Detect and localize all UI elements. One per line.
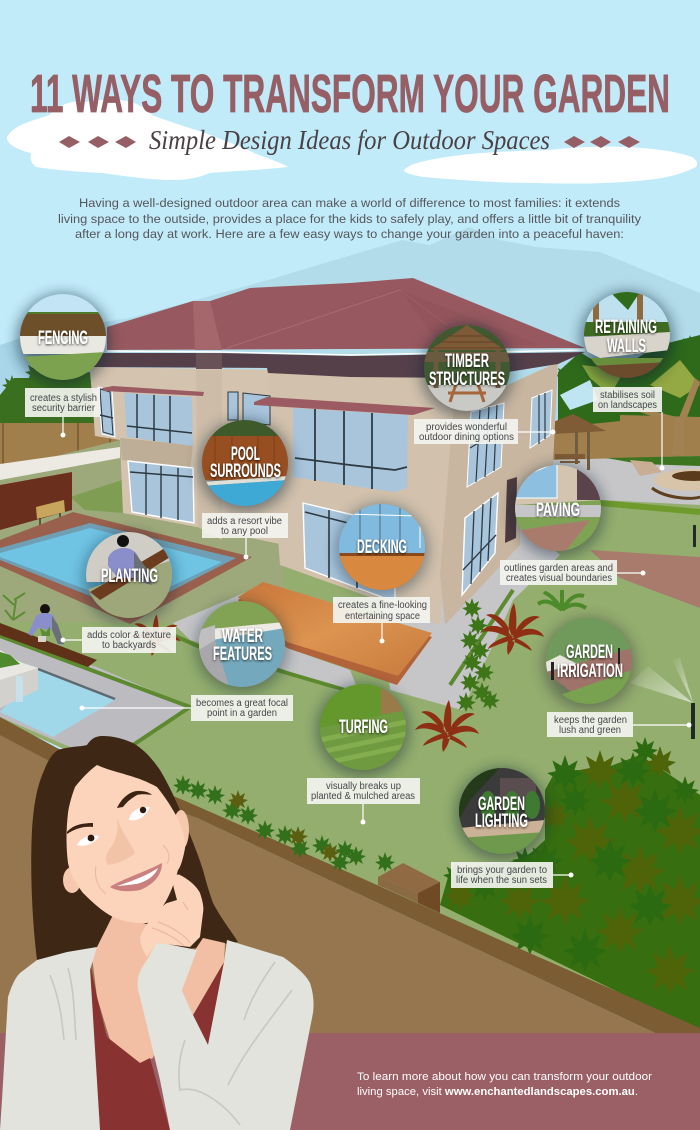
callout: pool surrounds: adds a resort vibe [207, 516, 282, 527]
right tree canopy [555, 335, 700, 455]
small sprinkler [693, 525, 696, 547]
canopy left [102, 386, 204, 396]
brick paving [590, 550, 700, 608]
left fence [0, 423, 125, 470]
red plant centre [415, 700, 479, 752]
hair [31, 736, 238, 960]
footer text: To learn more about how you can transform your outdoor [357, 1071, 652, 1083]
feature: fencing: FENCING [38, 328, 88, 349]
callout: water features [80, 695, 293, 721]
gardener [28, 604, 64, 645]
door [505, 477, 517, 543]
top right part [193, 962, 224, 1045]
mountains [0, 227, 700, 460]
hand [140, 874, 203, 957]
callout: planting: adds color & texture [87, 630, 171, 641]
callout: garden irrigation: keeps the garden [554, 715, 627, 726]
feature: water features: FEATURES [213, 644, 272, 665]
sprinkler [630, 658, 695, 739]
feature: garden lighting: LIGHTING [475, 811, 528, 832]
pavement by deck [173, 585, 362, 700]
big tree [440, 737, 700, 1032]
potted plants [3, 593, 25, 620]
clouds [7, 100, 697, 184]
intro paragraph: after a long day at work. Here are a few easy ways to change your garden into a peaceful haven: [75, 227, 624, 241]
bench [36, 500, 65, 525]
window: right wall far [530, 390, 552, 448]
feature: garden irrigation: IRRIGATION [557, 661, 623, 682]
callout: retaining walls: on landscapes [598, 400, 657, 411]
window: lower left [128, 461, 194, 523]
footer band [0, 1033, 700, 1130]
back pool coping [0, 512, 252, 624]
mouth [110, 863, 162, 891]
window: upper centre small [228, 392, 270, 425]
callout: water features: becomes a great focal [196, 698, 288, 709]
callout: turfing: planted & mulched areas [311, 791, 415, 802]
fascia [107, 350, 585, 355]
hedge row [600, 503, 700, 512]
grey pavement [0, 638, 190, 747]
window: right wall upper [467, 403, 504, 487]
hedge above wall [173, 775, 395, 872]
callout: paving [500, 560, 646, 585]
feature: pool surrounds: SURROUNDS [210, 461, 281, 482]
house [90, 278, 585, 625]
callout: timber structures: outdoor dining options [419, 432, 514, 443]
feature: planting [83, 532, 175, 624]
feature: paving: PAVING [536, 500, 580, 521]
callout: retaining walls [593, 387, 664, 470]
feature: decking [336, 503, 428, 596]
callout: turfing [307, 778, 420, 824]
canopy right [254, 397, 435, 415]
feature: decking: DECKING [357, 537, 407, 558]
window: right wall lower [462, 493, 498, 595]
feature: timber structures: STRUCTURES [429, 369, 505, 390]
roof [107, 278, 585, 350]
feature: turfing [317, 684, 409, 776]
callout: planting: to backyards [102, 640, 156, 651]
callout: garden lighting [451, 862, 574, 888]
lawn [0, 440, 700, 1040]
right eyebrow [117, 791, 152, 808]
right eye [129, 807, 150, 820]
feature: garden irrigation: GARDEN [566, 642, 613, 663]
red plant upper [480, 603, 544, 655]
feature: pool surrounds [199, 420, 291, 512]
window: upper bay [124, 393, 193, 446]
subtitle: Simple Design Ideas for Outdoor Spaces [149, 125, 550, 155]
callout: fencing [25, 388, 100, 438]
feature: fencing [17, 294, 109, 386]
left tree [0, 362, 95, 428]
callout: timber structures [414, 419, 556, 444]
right wall [440, 362, 558, 625]
callout: pool surrounds: to any pool [221, 526, 268, 537]
callout: pool surrounds [202, 513, 288, 560]
left bay wall [90, 367, 285, 545]
feature: garden lighting: GARDEN [478, 794, 525, 815]
garden scene background [0, 335, 700, 1040]
smile line [95, 845, 169, 894]
callout: decking: entertaining space [345, 611, 420, 622]
face [66, 765, 185, 923]
right fence [553, 415, 700, 460]
callout: garden irrigation: lush and green [559, 725, 621, 736]
red plant left [129, 614, 181, 656]
olive yard [0, 440, 285, 650]
right ear [173, 810, 189, 850]
white garden edge [0, 447, 120, 480]
feature: retaining walls: RETAINING [595, 317, 657, 338]
feature: planting: PLANTING [101, 566, 158, 587]
cardigan folds [50, 962, 292, 1125]
front pond [0, 670, 115, 737]
feature: retaining walls [581, 292, 673, 384]
feature: garden lighting [456, 768, 548, 860]
feature: garden irrigation [543, 618, 635, 710]
feature: timber structures [421, 325, 513, 417]
callout: planting [60, 627, 176, 653]
top left part [90, 963, 170, 1130]
house driveway [380, 520, 560, 710]
hedge strip [0, 590, 513, 745]
front wall [268, 373, 458, 625]
nose shadow [106, 817, 135, 865]
gazebo [553, 414, 606, 470]
climbing hedge [456, 598, 500, 712]
left ear [63, 867, 81, 893]
left eyebrow [67, 823, 93, 834]
forearm [181, 938, 225, 1015]
diamonds left [59, 136, 136, 148]
window: upper right big [293, 408, 408, 492]
woman character [0, 736, 314, 1130]
callout: water features: point in a garden [207, 708, 277, 719]
callout: garden irrigation [547, 712, 692, 737]
round planter [652, 469, 700, 498]
callout: decking [333, 597, 430, 644]
callout: paving: outlines garden areas and [504, 563, 613, 574]
mulch bed [0, 623, 97, 667]
intro paragraph: Having a well-designed outdoor area can make a world of difference to most families: it extends [79, 196, 620, 210]
intro paragraph: living space to the outside, provides a place for the kids to safely play, and offers a little bit of tranquility [58, 212, 642, 226]
callout: decking: creates a fine-looking [338, 600, 427, 611]
feature: water features: WATER [222, 626, 263, 647]
deck [238, 582, 432, 685]
callout: turfing: visually breaks up [326, 781, 401, 792]
right courtyard [552, 456, 700, 520]
neck and chest [92, 915, 170, 1063]
intro paragraph [58, 196, 642, 241]
window: lower front [303, 503, 395, 602]
window: left side [98, 387, 115, 437]
callout: timber structures: provides wonderful [426, 422, 507, 433]
back pool water [0, 523, 236, 612]
callout: garden lighting: brings your garden to [457, 865, 547, 876]
front lower garden [0, 590, 695, 752]
wall post [378, 863, 440, 913]
palm plant [538, 590, 586, 610]
callout: retaining walls: stabilises soil [600, 390, 655, 401]
cardigan left [0, 947, 100, 1130]
feature: paving [512, 462, 604, 557]
footer link line: living space, visit www.enchantedlandscapes.com.au . [357, 1086, 638, 1098]
callout: garden lighting: life when the sun sets [456, 875, 547, 886]
feature: retaining walls: WALLS [607, 336, 646, 357]
feature: timber structures: TIMBER [445, 351, 489, 372]
cardigan right [138, 940, 314, 1130]
diamonds right [564, 136, 640, 148]
brown boundary wall [0, 717, 700, 1035]
left eye [77, 835, 99, 846]
dark band [90, 352, 585, 378]
feature: turfing: TURFING [339, 717, 388, 738]
feature: pool surrounds: POOL [231, 444, 260, 465]
timber screen [0, 472, 72, 530]
callout: fencing: creates a stylish [30, 393, 97, 404]
water feature block [0, 650, 38, 708]
finger lines [152, 902, 190, 946]
feature: water features [196, 600, 288, 693]
callout: paving: creates visual boundaries [506, 573, 612, 584]
callout: fencing: security barrier [32, 403, 96, 414]
